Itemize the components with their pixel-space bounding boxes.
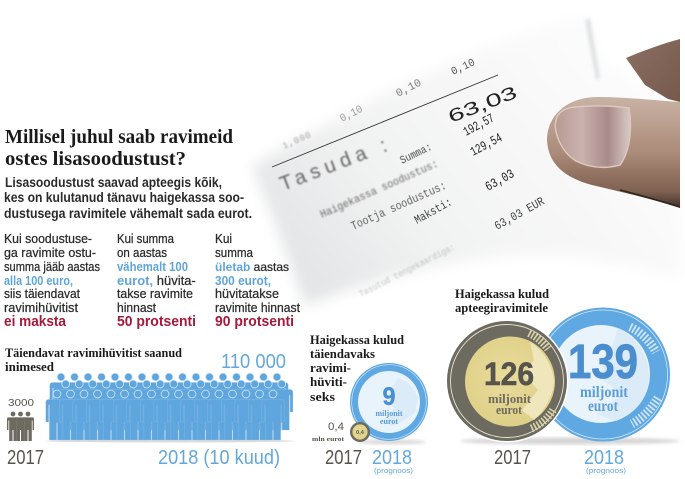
receipt text: 0,10	[338, 104, 365, 126]
coin: 126 million euros: eurot	[496, 402, 523, 417]
receipt text: 192,57	[461, 111, 497, 140]
column: over 300 euros: ületab aastas	[215, 260, 289, 274]
coin: 0,4 million euros: 0,4	[356, 430, 365, 436]
label: 0,4 mln eurot: mln eurot	[312, 437, 344, 443]
thumb	[547, 97, 680, 208]
column: under 100 euros: alla 100 euro,	[4, 273, 73, 288]
label: 2018 prognosis small chart: (prognoos)	[374, 468, 413, 475]
title	[5, 126, 233, 170]
receipt text: 63,03 EUR	[492, 195, 547, 233]
receipt text: Tasutud tengekaardiga:	[358, 243, 457, 300]
coin: 139 million euros: 139	[568, 336, 638, 389]
coin: 139 million euros	[460, 308, 680, 444]
intro text	[4, 174, 252, 221]
pictogram: 2017 people	[7, 412, 34, 441]
column: over 300 euros: 300 eurot,	[215, 273, 271, 288]
intro text: dustusega ravimitele vähemalt sada eurot.	[4, 205, 252, 221]
column: at least 100 euros: 50 protsenti	[117, 313, 196, 330]
heading: additional benefit costs	[310, 332, 405, 404]
label: 2017 large chart: 2017	[494, 447, 531, 469]
value: 3000: 3000	[8, 397, 34, 409]
label: 2017 small chart: 2017	[325, 447, 362, 469]
column: under 100 euros: ei maksta	[4, 313, 67, 330]
receipt text: 0,10	[394, 78, 424, 101]
column: under 100 euros	[4, 231, 100, 330]
receipt text: 1,000	[281, 130, 313, 152]
column: over 300 euros: hüvitatakse	[215, 286, 279, 301]
heading: people receiving the benefit: inimesed	[5, 359, 55, 374]
coin: 9 million euros: eurot	[380, 417, 398, 426]
column: under 100 euros: Kui soodustuse-	[4, 231, 92, 246]
column: at least 100 euros: hinnast	[117, 300, 156, 315]
heading: additional benefit costs: hüviti-	[310, 374, 347, 389]
coin: 126 million euros: miljonit	[488, 391, 532, 406]
coin: 139 million euros: miljonit	[580, 384, 629, 401]
coin: 0,4 million euros	[350, 422, 370, 442]
coin: 126 million euros	[446, 320, 568, 442]
receipt printed rule	[272, 75, 498, 167]
column: over 300 euros: 90 protsenti	[215, 313, 294, 330]
coin: 9 million euros: miljonit	[375, 409, 403, 418]
column: over 300 euros: Kui	[215, 231, 232, 246]
receipt text: 63,03	[445, 82, 520, 127]
title: ostes lisasoodustust?	[5, 148, 186, 170]
column: over 300 euros: summa	[215, 245, 254, 260]
column: under 100 euros: summa jääb aastas	[4, 259, 100, 274]
column: at least 100 euros: takse ravimite	[117, 286, 193, 301]
heading: people receiving the benefit: Täiendavat ravimihüvitist saanud	[5, 345, 183, 360]
receipt text: Tasuda :	[277, 135, 390, 196]
receipt text: 0,10	[450, 57, 477, 79]
coin: 9 million euros	[350, 363, 428, 444]
column: at least 100 euros: vähemalt 100	[117, 259, 188, 274]
receipt text: Summa:	[398, 142, 434, 168]
coin: 139 million euros: eurot	[588, 398, 619, 415]
heading: pharmacy medicine costs	[455, 286, 550, 315]
column: under 100 euros: siis täiendavat	[4, 286, 80, 301]
receipt paper	[252, 14, 680, 305]
heading: additional benefit costs: seks	[310, 389, 335, 404]
label: 2018 prognosis large chart: 2018	[584, 447, 624, 469]
column: under 100 euros: ga ravimite ostu-	[4, 245, 96, 260]
title: Millisel juhul saab ravimeid	[5, 126, 233, 148]
finger behind receipt	[626, 39, 680, 102]
receipt text: Haigekassa soodustus:	[319, 159, 441, 222]
label: 0,4 mln eurot: 0,4	[328, 421, 344, 433]
intro text: kes on kulutanud tänavu haigekassa soo-	[4, 189, 244, 205]
label: 2018 prognosis small chart: 2018	[372, 447, 412, 469]
heading: people receiving the benefit	[5, 345, 183, 374]
column: over 300 euros: ravimite hinnast	[215, 300, 300, 315]
label: 0,4 mln eurot	[312, 421, 344, 443]
column: at least 100 euros	[117, 231, 196, 330]
column: at least 100 euros: on aastas	[117, 245, 167, 260]
heading: additional benefit costs: täiendavaks	[310, 346, 375, 361]
coin: 9 million euros: 9	[382, 383, 396, 411]
column: at least 100 euros: eurot, hüvita-	[117, 273, 196, 288]
label: 2017: 2017	[7, 447, 44, 469]
receipt text: 129,54	[468, 130, 505, 160]
coin: 126 million euros: 126	[484, 356, 534, 392]
column: over 300 euros	[215, 231, 300, 330]
photo: receipt held by a thumb	[252, 14, 680, 305]
label: 2018 prognosis large chart: (prognoos)	[586, 468, 626, 475]
label: 2018 (10 kuud): 2018 (10 kuud)	[158, 447, 280, 469]
receipt text: Maksti:	[412, 195, 455, 227]
value: 110 000: 110 000	[221, 351, 286, 373]
column: under 100 euros: ravimihüvitist	[4, 300, 78, 315]
heading: additional benefit costs: Haigekassa kulud	[310, 332, 405, 347]
receipt text: 63,03	[483, 166, 517, 194]
heading: pharmacy medicine costs: apteegiravimitele	[455, 300, 548, 315]
intro text: Lisasoodustust saavad apteegis kõik,	[5, 174, 222, 190]
heading: additional benefit costs: ravimi-	[310, 360, 351, 375]
receipt text: Tootja soodustus:	[349, 179, 449, 234]
receipt text	[277, 57, 547, 300]
pictogram: 2018 people	[45, 373, 295, 442]
heading: pharmacy medicine costs: Haigekassa kulud	[455, 286, 550, 301]
column: at least 100 euros: Kui summa	[117, 231, 175, 246]
